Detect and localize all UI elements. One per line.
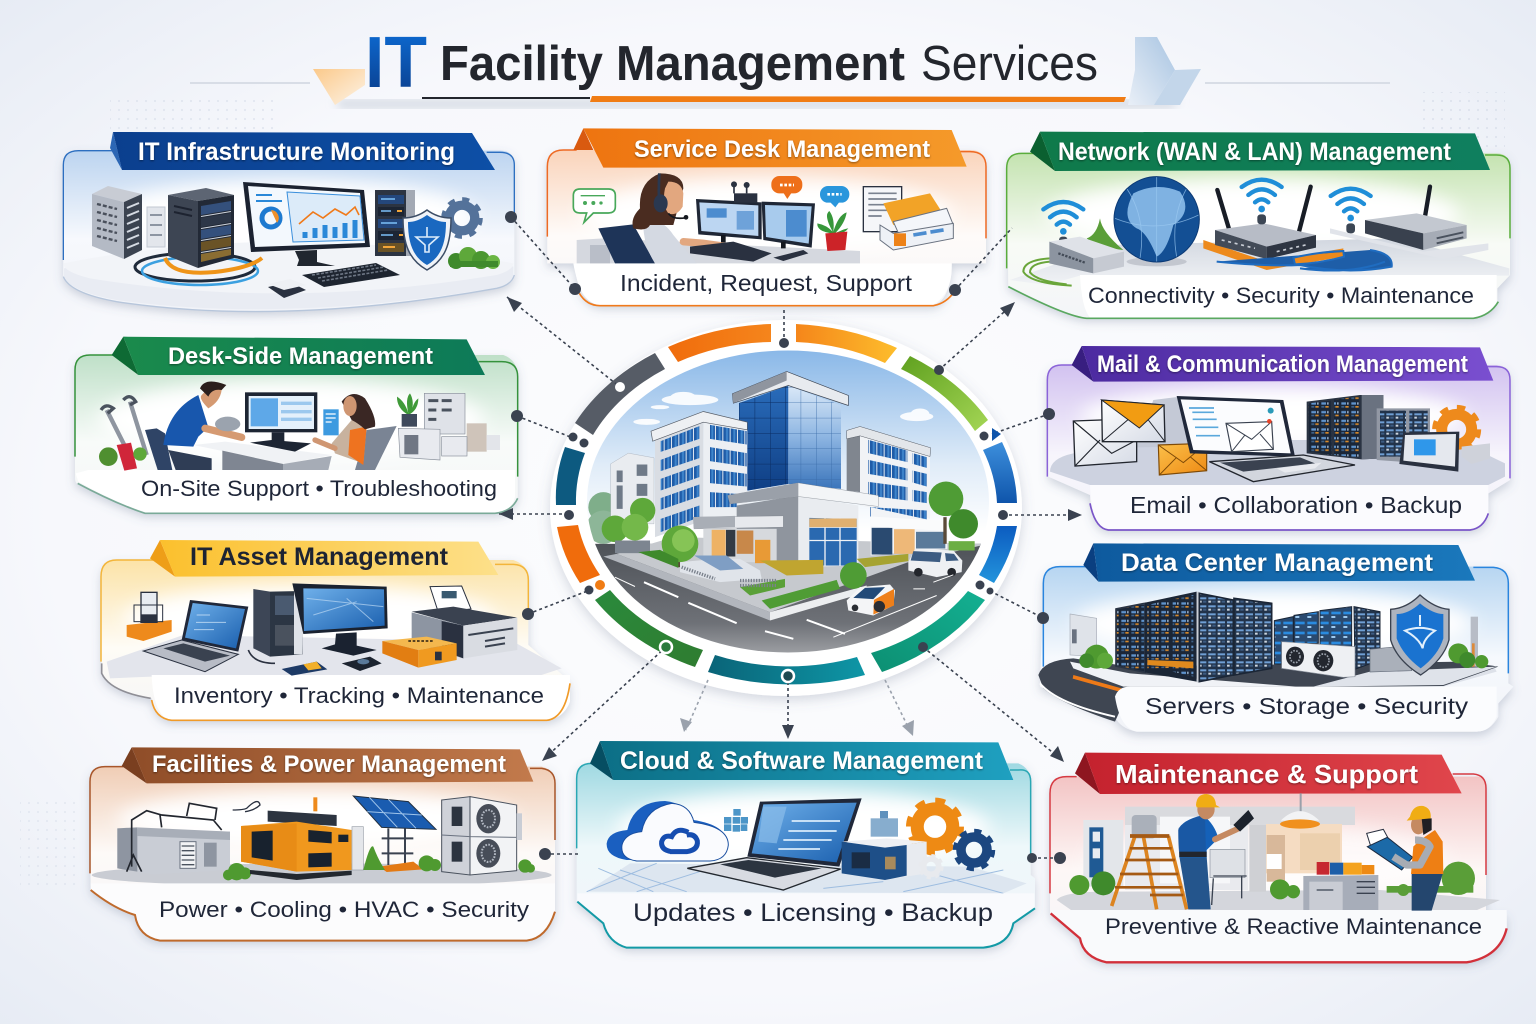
icon: technician in blue xyxy=(1178,794,1254,909)
icon: globe xyxy=(1114,177,1199,266)
icon: tablet xyxy=(1399,432,1459,472)
panel: Cloud & Software Management xyxy=(577,741,1035,948)
icon: envelope with orange flap xyxy=(1102,400,1165,442)
icon: ceiling lamp xyxy=(1280,793,1320,829)
icon: rack xyxy=(1377,408,1430,462)
icon: desk monitors xyxy=(690,181,815,262)
podium xyxy=(737,496,798,564)
banner title: Facilities & Power Management xyxy=(152,751,506,778)
building scene xyxy=(587,350,989,652)
icon: laptop xyxy=(687,798,862,890)
ring segments xyxy=(556,324,1017,684)
text: caption: Power • Cooling • HVAC • Security xyxy=(159,897,529,922)
icon: tower pc xyxy=(253,589,303,657)
icon: back laptop shadow xyxy=(1137,397,1190,447)
icon: generator xyxy=(241,797,352,880)
icon: man in blue shirt xyxy=(163,382,242,470)
icon: grey equipment xyxy=(117,803,230,874)
panel: Service Desk Management xyxy=(547,128,986,306)
icon: small block xyxy=(871,811,898,837)
icon: clipboard xyxy=(1367,829,1413,870)
central ring and building xyxy=(550,320,1022,696)
icon: dark gear xyxy=(956,832,992,868)
icon: small server xyxy=(147,207,165,247)
icon: machines xyxy=(398,393,500,460)
icon: blue cables xyxy=(1217,250,1392,271)
icon: folder and box xyxy=(880,193,953,250)
banner xyxy=(590,741,1013,780)
icon: orange envelope xyxy=(1158,443,1207,475)
text: caption: Preventive & Reactive Maintenance xyxy=(1105,914,1482,939)
icon: wifi left xyxy=(1043,202,1083,247)
icon: bush xyxy=(518,859,535,873)
icon: chair behind man xyxy=(145,428,172,470)
icon: orange gear xyxy=(1436,408,1478,450)
panel: Network (WAN & LAN) Management xyxy=(1007,132,1510,318)
icon: monitor xyxy=(245,392,317,452)
icon: inspector in orange vest xyxy=(1393,806,1443,911)
right wing xyxy=(846,436,860,492)
icon: chair behind woman xyxy=(355,426,397,470)
icon: plant xyxy=(397,393,418,427)
icon: monitor with chart xyxy=(243,182,370,266)
banner xyxy=(122,747,533,783)
icon: blue document xyxy=(323,409,339,435)
left wing xyxy=(655,422,703,537)
banner xyxy=(573,128,967,168)
hedges xyxy=(638,550,908,609)
icon: printer xyxy=(412,586,517,658)
banner title: Network (WAN & LAN) Management xyxy=(1058,138,1452,166)
banner xyxy=(1072,346,1493,382)
banner title: Mail & Communication Management xyxy=(1097,351,1468,378)
icon: bush xyxy=(448,247,500,269)
icon: plant xyxy=(1087,218,1123,250)
text: caption: Email • Collaboration • Backup xyxy=(1130,492,1462,518)
icon: front server racks xyxy=(1116,592,1272,682)
icon: left switch xyxy=(1049,237,1124,273)
text: caption: Updates • Licensing • Backup xyxy=(633,899,993,927)
icon: device box xyxy=(268,279,306,298)
white ring backing xyxy=(550,320,1022,696)
road markings xyxy=(615,575,953,639)
left trees xyxy=(602,498,655,542)
icon: gear xyxy=(444,200,480,236)
icon: grey server xyxy=(92,186,142,259)
title banner xyxy=(313,23,1201,108)
icon: right router xyxy=(1330,187,1488,259)
icon: bushes xyxy=(99,447,147,466)
icon: tower and bush xyxy=(1448,617,1488,668)
road xyxy=(587,544,990,657)
icon: bushes right xyxy=(1387,862,1475,896)
icon: desk xyxy=(193,442,332,470)
icon: appliance xyxy=(1303,875,1378,910)
right trees xyxy=(929,482,978,550)
icon: bush xyxy=(223,863,251,880)
icon: cooling unit xyxy=(1282,642,1355,677)
text: caption: Servers • Storage • Security xyxy=(1145,693,1469,719)
icon: small tool xyxy=(233,802,260,812)
icon: wifi right xyxy=(1331,189,1371,233)
icon: rack xyxy=(375,190,415,256)
icon: tools xyxy=(101,397,147,471)
banner title: IT Asset Management xyxy=(190,543,449,571)
banner title: Maintenance & Support xyxy=(1115,759,1418,789)
icon: white server xyxy=(1070,614,1097,657)
icon: bushes xyxy=(1069,871,1300,899)
icon: green cable xyxy=(1023,258,1072,286)
panel: IT Asset Management xyxy=(101,540,570,720)
icon: operator with headset xyxy=(598,173,740,263)
icon: coloured boxes xyxy=(1317,862,1374,875)
text: caption: Incident, Request, Support xyxy=(620,270,913,296)
entrance xyxy=(693,516,783,529)
icon: white gear xyxy=(920,856,942,878)
connector dots and arrows xyxy=(499,211,1082,864)
silver car xyxy=(680,556,777,586)
panel: IT Infrastructure Monitoring xyxy=(63,132,514,312)
white van xyxy=(908,549,962,577)
title text: Services: Services xyxy=(921,37,1098,91)
icon: document xyxy=(863,187,902,232)
icon: ladder xyxy=(1112,836,1187,909)
banner: IT Infrastructure Monitoring xyxy=(138,138,455,166)
icon: orange chat bubble xyxy=(771,176,802,199)
icon: cloud xyxy=(607,801,728,861)
orange car xyxy=(847,584,895,616)
icon: main router xyxy=(1203,187,1343,270)
background building xyxy=(611,453,654,524)
icon: platform road xyxy=(1038,658,1498,722)
title text: IT: IT xyxy=(365,23,427,103)
icon: shield xyxy=(403,210,451,270)
icon: cables xyxy=(135,253,262,285)
icon: wifi center xyxy=(1242,180,1282,224)
center tree xyxy=(662,526,698,567)
text: caption: On-Site Support • Troubleshooting xyxy=(141,476,497,501)
icon: white envelope xyxy=(1073,419,1137,466)
icon: blue squares xyxy=(724,809,748,832)
icon: grey box xyxy=(1370,647,1412,672)
panel: Mail & Communication Management xyxy=(1047,346,1510,530)
icon: laptop xyxy=(143,600,248,672)
icon: server box xyxy=(842,838,927,880)
banner title: Cloud & Software Management xyxy=(620,747,984,775)
banner title: Desk-Side Management xyxy=(168,343,433,370)
icon: desk xyxy=(577,238,860,263)
panel: Maintenance & Support xyxy=(1050,753,1507,962)
icon: shield xyxy=(1391,595,1449,675)
panel: Desk-Side Management xyxy=(75,337,518,513)
banner xyxy=(1030,132,1490,171)
icon: monitor xyxy=(292,583,388,656)
icon: laptop with mail xyxy=(1177,396,1355,482)
icon: bush xyxy=(1079,645,1113,669)
icon: keyboard xyxy=(302,263,400,287)
icon: blue chat bubble xyxy=(820,186,849,207)
icon: woman xyxy=(315,394,375,465)
banner xyxy=(150,540,498,577)
panel: Facilities & Power Management xyxy=(90,747,555,941)
banner xyxy=(1075,753,1462,794)
icon: orange box xyxy=(382,637,457,668)
text: caption: Inventory • Tracking • Maintenance xyxy=(174,683,544,708)
site lot xyxy=(617,537,988,612)
connector lines xyxy=(499,217,1080,858)
icon: orange gear xyxy=(910,802,960,852)
icon: plants xyxy=(363,846,441,871)
icon: orange stand xyxy=(127,592,172,641)
banner xyxy=(1083,543,1475,582)
text: caption: Connectivity • Security • Maintenance xyxy=(1088,283,1474,308)
panel: Data Center Management xyxy=(1038,543,1513,732)
title text: Facility Management: Facility Management xyxy=(440,37,905,91)
tower xyxy=(739,386,788,490)
icon: desk plant xyxy=(817,211,848,251)
icon: back room xyxy=(1083,807,1355,905)
icon: solar panel xyxy=(352,796,436,872)
banner title: Service Desk Management xyxy=(634,136,930,163)
banner xyxy=(112,337,485,375)
banner xyxy=(110,132,495,170)
icon: green chat bubble xyxy=(573,189,615,222)
icon: server racks xyxy=(1307,395,1383,459)
banner title: Data Center Management xyxy=(1121,549,1434,577)
clouds xyxy=(633,392,933,425)
icon: back server racks xyxy=(1274,607,1380,669)
icon: hvac unit xyxy=(442,797,522,875)
icon: dark server tower xyxy=(168,188,234,268)
icon: small items xyxy=(248,650,382,676)
icon: grey box xyxy=(1462,443,1490,464)
